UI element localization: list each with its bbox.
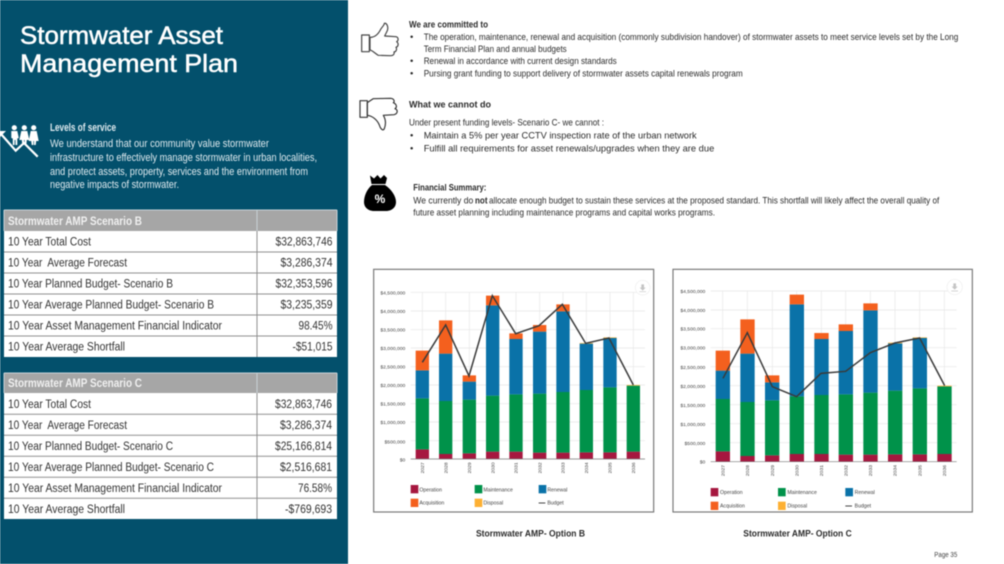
table: scenario C [4, 373, 337, 519]
icon: thumbs down [360, 98, 397, 130]
chart: option B [374, 269, 654, 512]
title: Management Plan [20, 50, 238, 78]
series: operation [416, 449, 640, 459]
axis line [411, 458, 645, 460]
x axis labels: 2029 [770, 465, 776, 476]
table: scenario C: 10 Year Average Forecast [8, 420, 128, 432]
table: scenario C: 10 Year Asset Management Financial Indicator [8, 483, 222, 495]
icon: download button [635, 280, 650, 295]
caption: option B: Stormwater AMP- Option B [476, 528, 585, 539]
series: operation [716, 451, 952, 462]
x axis labels: 2031 [819, 465, 825, 476]
icon: thumbs up [362, 23, 398, 56]
table: scenario C: $25,166,814 [275, 441, 333, 453]
y axis labels: $2,000,000 [380, 383, 406, 389]
y axis labels: $4,000,000 [680, 308, 706, 314]
text block: levels of service: We understand that our community value stormwater [50, 138, 269, 150]
table: scenario C: 10 Year Total Cost [8, 399, 92, 411]
table: scenario C: 76.58% [298, 483, 332, 495]
text block: we are committed to [409, 19, 958, 79]
y axis labels: $3,000,000 [380, 346, 406, 352]
table: scenario B: 10 Year Total Cost [8, 236, 92, 248]
legend: Renewal [547, 487, 567, 493]
y axis labels: $1,000,000 [380, 420, 406, 426]
line: budget [723, 333, 945, 397]
y axis labels: $0 [400, 457, 406, 463]
y axis labels: $500,000 [685, 441, 706, 447]
legend: Disposal [483, 501, 503, 507]
table: scenario B [4, 210, 337, 357]
x axis labels: 2035 [917, 465, 923, 476]
icon: money bag with percent [364, 175, 396, 211]
x axis labels [420, 462, 637, 473]
series: acquisition [416, 296, 570, 382]
axis line [711, 461, 957, 463]
series: renewal [416, 305, 617, 401]
y axis labels: $0 [700, 460, 706, 466]
series: acquisition [716, 295, 878, 382]
text block: levels of service: infrastructure to effectively manage stormwater in urban localities, [50, 152, 317, 164]
table: scenario C: -$769,693 [285, 504, 332, 516]
table: scenario B: $32,863,746 [276, 236, 332, 248]
icon: community with trend line [0, 125, 39, 157]
text block: what we cannot do: Under present funding levels- Scenario C- we cannot : [409, 117, 604, 128]
x axis labels: 2033 [561, 462, 567, 473]
caption: option C: Stormwater AMP- Option C [743, 528, 852, 539]
series: disposal [888, 337, 952, 386]
x axis labels: 2028 [745, 465, 751, 476]
text block: we are committed to: Term Financial Plan and annual budgets [424, 44, 567, 55]
text block: we are committed to: Renewal in accordance with current design standards [424, 56, 617, 67]
legend: Operation [419, 487, 442, 493]
table: scenario B: 10 Year Average Forecast [8, 258, 128, 270]
text block: financial summary: future asset planning including maintenance programs and capital works programs. [413, 207, 715, 218]
x axis labels: 2032 [537, 462, 543, 473]
legend: Acquisition [419, 501, 444, 507]
table: scenario C: $3,286,374 [280, 420, 333, 432]
y axis labels: $2,500,000 [680, 365, 706, 371]
x axis labels: 2036 [942, 465, 948, 476]
y axis labels: $500,000 [385, 439, 406, 445]
x axis labels [720, 465, 948, 476]
table: scenario B: -$51,015 [292, 342, 332, 354]
title: Stormwater Asset [20, 22, 223, 50]
text block: financial summary [413, 183, 940, 218]
series: maintenance [716, 386, 952, 456]
y axis labels: $1,000,000 [680, 422, 706, 428]
text block: we are committed to: Pursing grant funding to support delivery of stormwater assets capital renewals program [424, 68, 743, 79]
legend [711, 488, 875, 510]
table: scenario B: 10 Year Average Planned Budget- Scenario B [8, 300, 214, 312]
text block: we are committed to: We are committed to [409, 19, 488, 30]
legend: Operation [720, 490, 743, 496]
table: scenario C: 10 Year Planned Budget- Scenario C [8, 441, 173, 453]
text block: what we cannot do: • [410, 131, 413, 142]
series: maintenance [416, 386, 640, 454]
table: scenario B: $3,235,359 [280, 300, 332, 312]
heading: levels of service: Levels of service [50, 122, 116, 134]
table: scenario B: 98.45% [298, 320, 332, 332]
x axis labels: 2030 [490, 462, 496, 473]
series: renewal [716, 304, 927, 402]
x axis labels: 2032 [843, 465, 849, 476]
icon: money bag with percent: % [375, 192, 386, 206]
y axis labels: $1,500,000 [680, 403, 706, 409]
text block: levels of service: and protect assets, property, services and the environment from [50, 166, 308, 178]
text block: financial summary: We currently do [413, 195, 473, 206]
x axis labels: 2036 [631, 462, 637, 473]
line: budget [422, 296, 633, 385]
text block: financial summary: Financial Summary: [413, 183, 486, 194]
table: scenario B: 10 Year Planned Budget- Scenario B [8, 278, 173, 290]
x axis labels: 2028 [443, 462, 449, 473]
table: scenario C: $2,516,681 [280, 462, 332, 474]
table: scenario C: Stormwater AMP Scenario C [8, 378, 142, 390]
title [20, 22, 238, 78]
series: disposal [580, 337, 640, 386]
legend: Disposal [787, 504, 807, 510]
y axis labels: $4,000,000 [380, 309, 406, 315]
y axis labels: $2,000,000 [680, 384, 706, 390]
x axis labels: 2027 [420, 462, 426, 473]
table: scenario B: Stormwater AMP Scenario B [8, 216, 142, 228]
x axis labels: 2030 [794, 465, 800, 476]
table: scenario B: $32,353,596 [276, 278, 332, 290]
legend: Budget [855, 504, 872, 510]
y axis labels: $3,500,000 [380, 328, 406, 334]
y axis labels: $3,500,000 [680, 327, 706, 333]
y axis labels: $3,000,000 [680, 346, 706, 352]
x axis labels: 2027 [720, 465, 726, 476]
text block: what we cannot do: Fulfill all requirements for asset renewals/upgrades when they are due [424, 143, 714, 154]
text block: levels of service [50, 138, 317, 191]
table: scenario B: 10 Year Average Shortfall [8, 342, 125, 354]
text block: what we cannot do [409, 99, 714, 154]
table: scenario C: $32,863,746 [275, 399, 332, 411]
legend: Maintenance [787, 490, 817, 496]
legend: Acquisition [720, 504, 745, 510]
x axis labels: 2033 [868, 465, 874, 476]
y axis labels [380, 291, 406, 463]
legend: Budget [547, 501, 564, 507]
text block: financial summary: allocate enough budget to sustain these services at the proposed standard. This shortfall will likely affect the overall quality of [489, 195, 940, 206]
table: scenario B: $3,286,374 [280, 258, 333, 270]
table: scenario C: 10 Year Average Shortfall [8, 504, 125, 516]
y axis labels: $2,500,000 [380, 365, 406, 371]
text block: we are committed to: • [410, 56, 413, 67]
text block: what we cannot do: What we cannot do [409, 99, 491, 110]
x axis labels: 2031 [514, 462, 520, 473]
x axis labels: 2034 [893, 465, 899, 476]
text block: we are committed to: • [410, 68, 413, 79]
y axis labels [680, 289, 706, 466]
icon: download button [947, 279, 962, 295]
text block: financial summary: not [475, 195, 488, 206]
table: scenario C: 10 Year Average Planned Budget- Scenario C [8, 462, 214, 474]
legend [411, 485, 567, 507]
text block: what we cannot do: Maintain a 5% per year CCTV inspection rate of the urban network [424, 131, 697, 142]
table: scenario B: 10 Year Asset Management Financial Indicator [8, 320, 222, 332]
text block: levels of service: negative impacts of stormwater. [50, 179, 179, 191]
y axis labels: $4,500,000 [380, 291, 406, 297]
x axis labels: 2034 [584, 462, 590, 473]
text block: what we cannot do: • [410, 143, 413, 154]
chart: option C [673, 269, 972, 512]
panel: left sidebar [0, 0, 348, 564]
legend: Maintenance [483, 487, 513, 493]
x axis labels: 2035 [608, 462, 614, 473]
text block: we are committed to: • [410, 32, 413, 43]
y axis labels: $4,500,000 [680, 289, 706, 295]
y axis labels: $1,500,000 [380, 402, 406, 408]
x axis labels: 2029 [467, 462, 473, 473]
page number: Page 35 [934, 552, 957, 559]
legend: Renewal [855, 490, 875, 496]
